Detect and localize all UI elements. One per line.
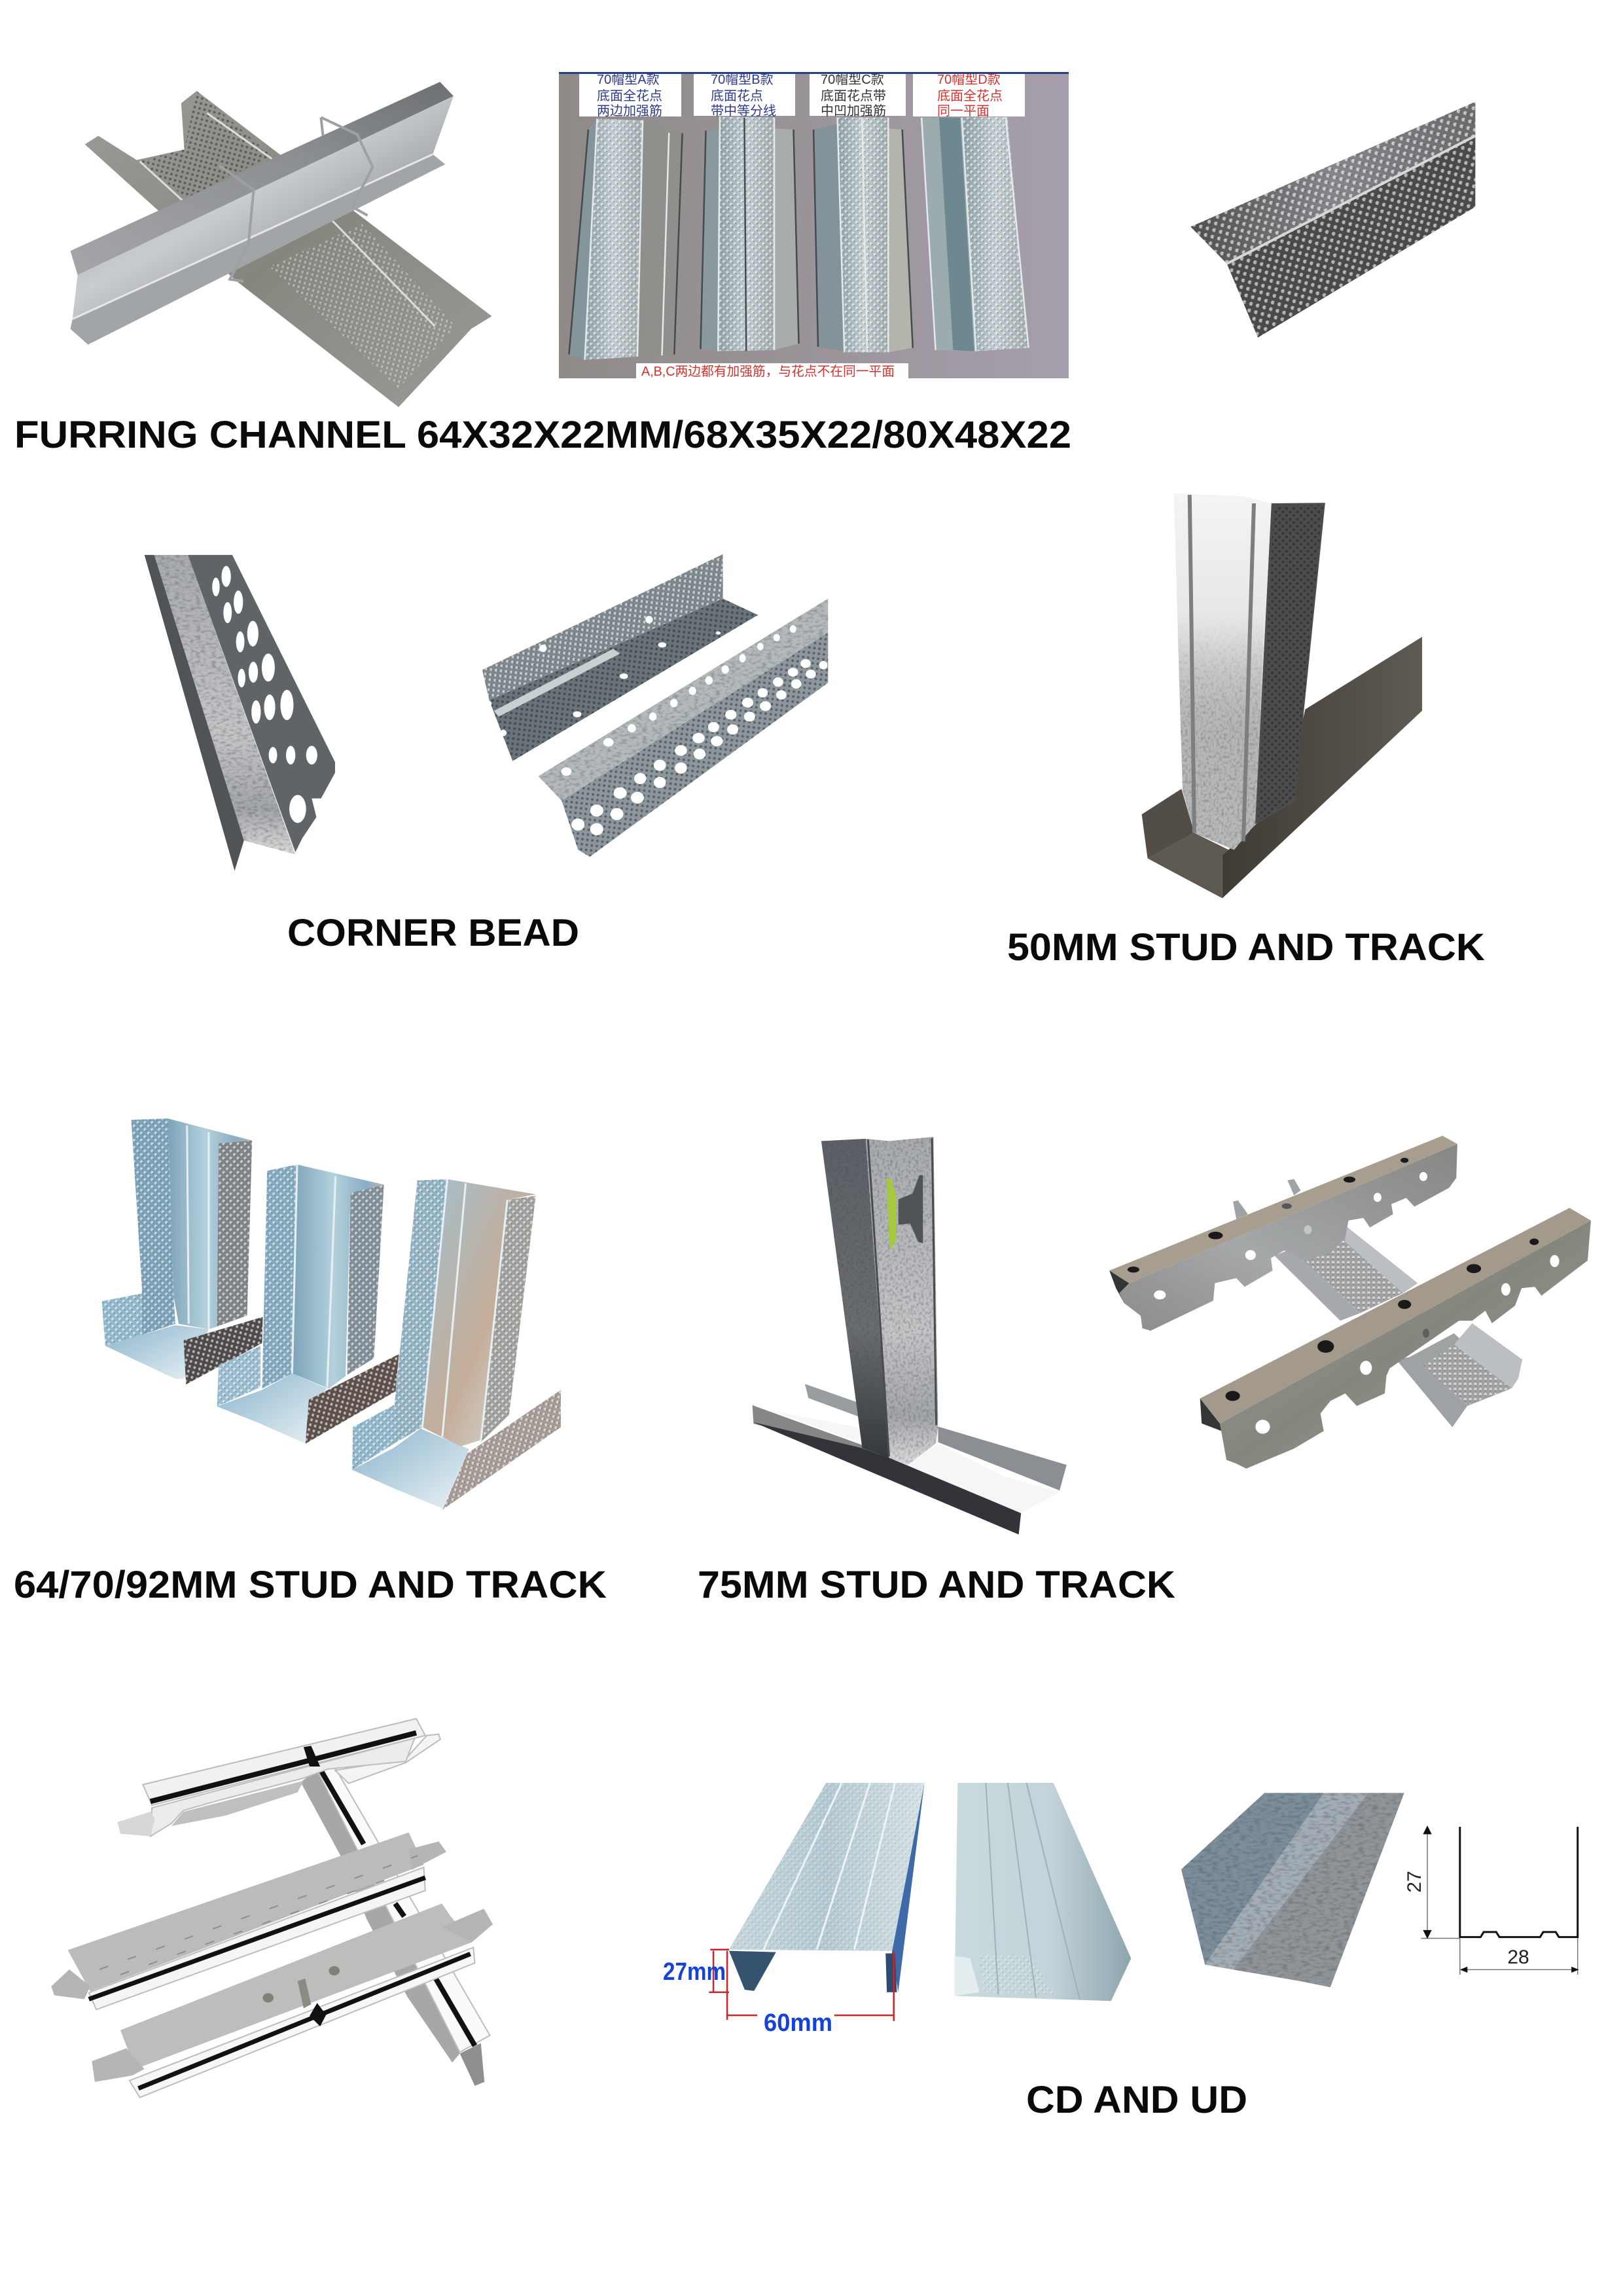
stud <box>821 1137 938 1465</box>
rear pins <box>1233 1179 1300 1219</box>
stud cutout <box>886 1178 897 1250</box>
section drawing <box>1421 1825 1579 1975</box>
dimension label: 60mm: 60mm <box>764 2009 832 2037</box>
variant labels: 70帽型B款 <box>711 72 774 87</box>
dimension label: 27mm: 27mm <box>663 1958 726 1986</box>
perforated bead <box>539 599 828 857</box>
small stud <box>102 1119 263 1384</box>
variant labels: 底面全花点 <box>597 88 662 103</box>
title: furring channel: FURRING CHANNEL 64X32X22MM/68X35X22/80X48X22 <box>14 414 1071 456</box>
panel: corner bead pair photo <box>482 554 828 857</box>
variant labels: 底面全花点 <box>937 88 1003 103</box>
top main tee <box>117 1719 440 1837</box>
rear main channel <box>1109 1136 1457 1331</box>
variant labels: 带中等分线 <box>711 103 776 118</box>
under channel <box>85 91 491 407</box>
bead holes <box>212 566 317 823</box>
panel: corner bead close-up photo <box>145 555 335 871</box>
top channel <box>71 82 454 345</box>
variant labels: 同一平面 <box>937 104 990 118</box>
track <box>753 1384 1067 1534</box>
variant labels: 70帽型A款 <box>597 72 660 87</box>
wire clip <box>219 117 373 281</box>
footnote label: A,B,C两边都有加强筋，与花点不在同一平面 <box>641 364 895 379</box>
variant labels: 中凹加强筋 <box>821 103 886 118</box>
middle main tee <box>51 1833 446 2009</box>
red dimension lines <box>709 1950 894 2021</box>
panel: four furring channel variants photo <box>559 68 1069 379</box>
panel: 75mm stud and track photo <box>753 1137 1067 1534</box>
medium stud <box>217 1164 399 1444</box>
variant labels: 底面花点带 <box>821 88 886 103</box>
panel: perforated furring strip photo <box>1190 101 1475 338</box>
title: CD and UD: CD AND UD <box>1026 2079 1247 2121</box>
panel: 64/70/92mm stud and track photo <box>102 1119 561 1510</box>
drawing label: 28: 28 <box>1507 1946 1529 1968</box>
title: 50mm stud and track: 50MM STUD AND TRACK <box>1007 926 1485 969</box>
variant labels: 70帽型D款 <box>937 72 1001 87</box>
title: 75mm stud and track: 75MM STUD AND TRACK <box>698 1564 1175 1606</box>
stud <box>1174 493 1325 850</box>
title: corner bead: CORNER BEAD <box>287 912 579 954</box>
UD photo <box>1181 1793 1404 1987</box>
panel: ceiling T-grid photo <box>51 1719 493 2098</box>
panel: 50mm stud and track photo <box>1142 493 1422 898</box>
front main channel <box>1200 1208 1591 1469</box>
panel: CD profile photos with dimensions <box>663 1783 1131 2037</box>
variant labels: 底面花点 <box>711 88 763 103</box>
panel: furring channel crossed pair photo <box>71 82 491 407</box>
panel: main channel and cross channel photo <box>1109 1136 1591 1469</box>
CD underside profile <box>954 1783 1131 2001</box>
cross channel <box>1274 1225 1522 1427</box>
large stud <box>352 1179 561 1510</box>
variant labels <box>559 68 1069 118</box>
plain bead <box>482 554 758 761</box>
drawing label: 27: 27 <box>1404 1871 1425 1893</box>
photo background <box>559 73 1069 378</box>
panel: UD profile photo and section drawing <box>1181 1793 1579 1987</box>
track <box>1142 637 1422 898</box>
variant labels: 70帽型C款 <box>821 72 884 87</box>
title: 64/70/92mm stud and track: 64/70/92MM STUD AND TRACK <box>14 1564 607 1606</box>
front main tee <box>92 1903 493 2098</box>
CD open end profile <box>729 1783 925 1992</box>
cross tee behind <box>300 1764 490 2086</box>
four profiles <box>569 117 1029 360</box>
variant labels: 两边加强筋 <box>597 103 662 118</box>
